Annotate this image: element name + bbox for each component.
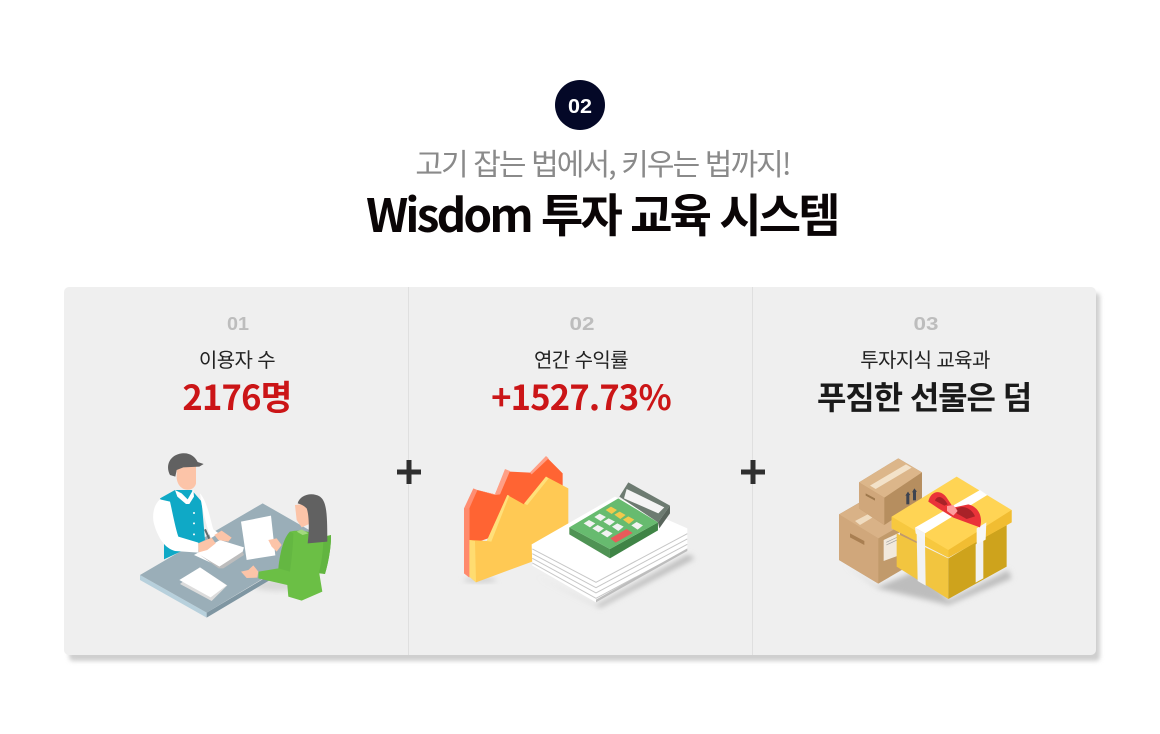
users label: 이용자 수 <box>199 344 275 373</box>
return value: +1527.73% <box>491 370 671 420</box>
gift number: 03 <box>914 313 938 334</box>
plus sign 1 <box>397 460 421 484</box>
section number badge: 02 <box>568 96 592 118</box>
subtitle: 고기 잡는 법에서, 키우는 법까지! <box>415 140 790 184</box>
icon: chart, calculator and papers <box>463 456 695 608</box>
gift headline: 푸짐한 선물은 덤 <box>817 373 1031 419</box>
gift label: 투자지식 교육과 <box>860 344 990 373</box>
users number: 01 <box>227 313 249 334</box>
users value: 2176명 <box>182 370 292 420</box>
panel: users <box>140 313 331 618</box>
section number badge <box>555 80 605 130</box>
return label: 연간 수익률 <box>534 344 628 373</box>
panel background <box>64 287 1100 661</box>
panel: education and gift <box>817 313 1031 605</box>
return number: 02 <box>570 313 594 334</box>
plus sign 2 <box>741 460 765 484</box>
panel: annual return <box>463 313 695 608</box>
icon: boxes and gift <box>839 458 1012 605</box>
main title: Wisdom 투자 교육 시스템 <box>366 180 838 246</box>
icon: consultation at a table <box>140 453 331 618</box>
